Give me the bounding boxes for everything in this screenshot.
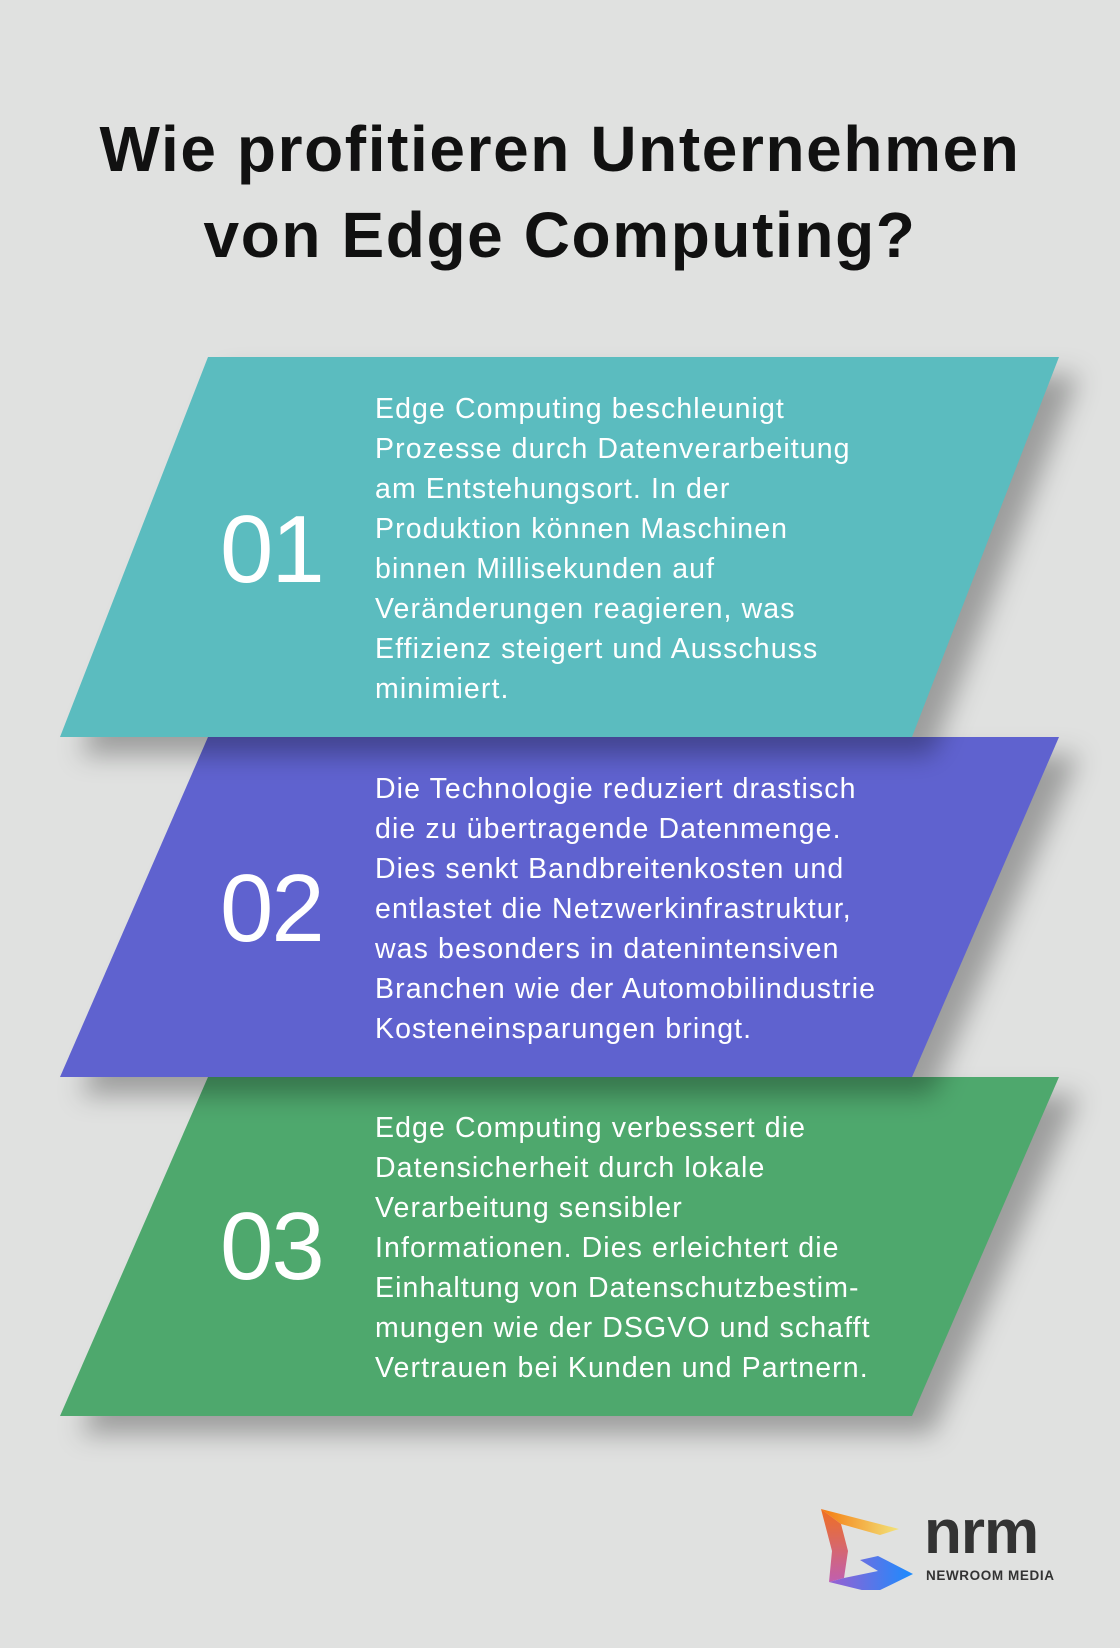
text 01: Veränderungen reagieren, was <box>375 593 796 625</box>
text 03: mungen wie der DSGVO und schafft <box>375 1312 871 1344</box>
text 02 <box>375 773 876 1045</box>
logo text: nrm <box>924 1498 1038 1567</box>
title: Wie profitieren Unternehmen <box>100 113 1020 185</box>
text 02: entlastet die Netzwerkinfrastruktur, <box>375 893 852 925</box>
text 02: Kosteneinsparungen bringt. <box>375 1013 752 1045</box>
title: von Edge Computing? <box>204 199 916 271</box>
text 02: Branchen wie der Automobilindustrie <box>375 973 876 1005</box>
text 01: am Entstehungsort. In der <box>375 473 730 505</box>
text 01 <box>375 393 851 705</box>
panel: 03 <box>60 1077 1086 1448</box>
text 01: Effizienz steigert und Ausschuss <box>375 633 818 665</box>
text 03 <box>375 1112 871 1384</box>
text 03: Vertrauen bei Kunden und Partnern. <box>375 1352 869 1384</box>
panel: 01 <box>60 357 1086 770</box>
number 02: 02 <box>220 855 323 962</box>
logo: NEWROOM MEDIA <box>926 1568 1055 1583</box>
text 01: Prozesse durch Datenverarbeitung <box>375 433 851 465</box>
title <box>100 113 1020 271</box>
text 02: Dies senkt Bandbreitenkosten und <box>375 853 844 885</box>
text 01: minimiert. <box>375 673 510 705</box>
text 01: binnen Millisekunden auf <box>375 553 715 585</box>
number 01: 01 <box>220 496 323 603</box>
text 03: Einhaltung von Datenschutzbestim- <box>375 1272 860 1304</box>
panel: 02 <box>60 737 1086 1110</box>
number 03: 03 <box>220 1193 323 1300</box>
text 03: Verarbeitung sensibler <box>375 1192 683 1224</box>
text 01: Edge Computing beschleunigt <box>375 393 785 425</box>
logo <box>821 1498 1055 1590</box>
text 02: was besonders in datenintensiven <box>375 933 840 965</box>
text 03: Datensicherheit durch lokale <box>375 1152 765 1184</box>
text 03: Informationen. Dies erleichtert die <box>375 1232 840 1264</box>
text 02: die zu übertragende Datenmenge. <box>375 813 842 845</box>
text 02: Die Technologie reduziert drastisch <box>375 773 857 805</box>
icon: logo mark <box>821 1509 913 1590</box>
text 03: Edge Computing verbessert die <box>375 1112 806 1144</box>
text 01: Produktion können Maschinen <box>375 513 788 545</box>
